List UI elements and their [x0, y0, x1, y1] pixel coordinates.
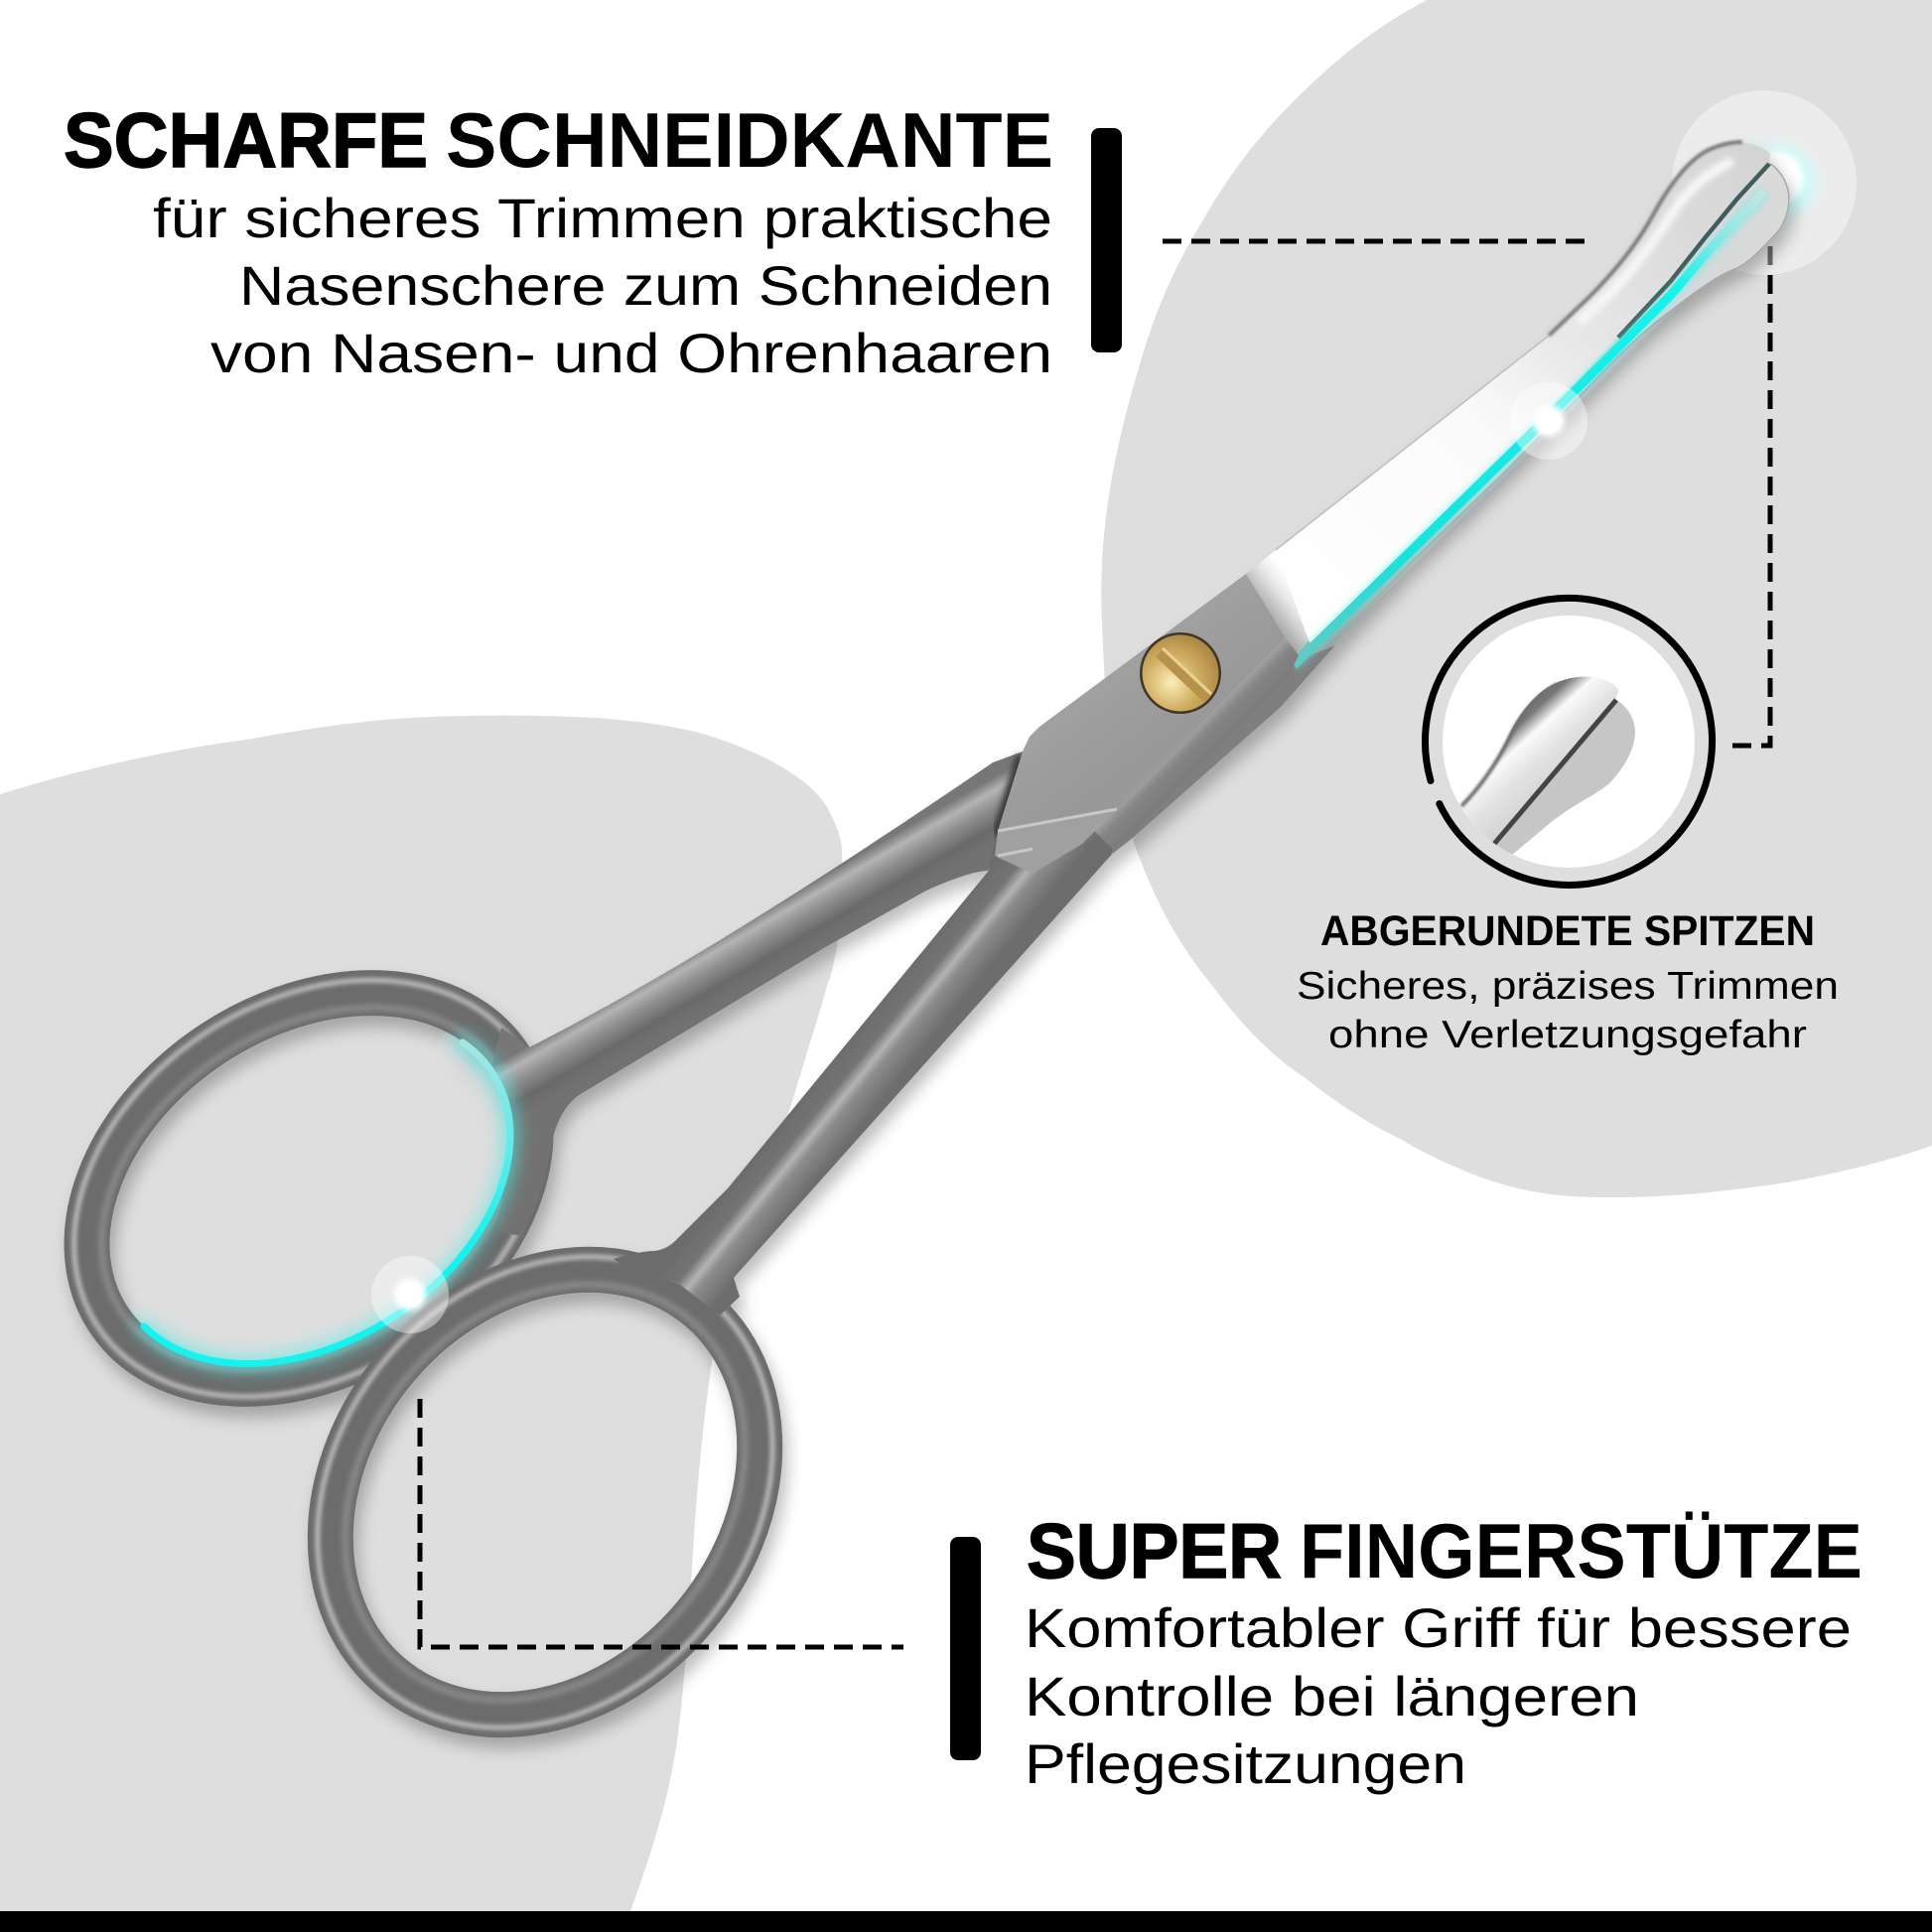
inset white disc	[1443, 616, 1695, 868]
background blob: top right	[1101, 0, 1932, 1197]
text block: rounded tips description: Sicheres, präzises Trimmen	[1297, 965, 1839, 1008]
text block: finger support description	[1025, 1596, 1852, 1795]
blade facet	[1246, 550, 1324, 657]
heading: Abgerundete Spitzen: ABGERUNDETE SPITZEN	[1320, 907, 1815, 955]
lower blade root	[1112, 645, 1335, 854]
tip highlight halo	[1672, 90, 1857, 275]
text block: finger support description: Komfortabler Griff für bessere	[1025, 1596, 1852, 1659]
bottom black bar	[0, 1911, 1932, 1932]
block crease	[998, 809, 1117, 856]
upper blade	[1276, 143, 1770, 645]
cutting edge cyan line	[1294, 192, 1764, 665]
text block: sharp edge description	[153, 187, 1052, 384]
heading: Super Fingerstütze	[1027, 1507, 1863, 1594]
upper handle stem	[491, 752, 1033, 1236]
text block: rounded tips description: ohne Verletzungsgefahr	[1328, 1014, 1807, 1056]
heading: Super Fingerstütze: SUPER	[1027, 1507, 1282, 1594]
inset blade tip	[1459, 677, 1635, 854]
lower finger ring	[223, 1165, 867, 1820]
handle crossing shadow	[999, 757, 1023, 836]
text block: finger support description: Pflegesitzungen	[1025, 1732, 1466, 1795]
text block: finger support description: Kontrolle bei längeren	[1025, 1665, 1639, 1727]
text block: rounded tips description	[1297, 965, 1839, 1056]
highlight dot: ring	[371, 1256, 449, 1333]
text block: sharp edge description: Nasenschere zum Schneiden	[239, 254, 1052, 317]
highlight dot: cutting edge	[1510, 382, 1587, 460]
inset ring	[1426, 598, 1713, 885]
inset lower blade	[1479, 700, 1635, 862]
heading: Scharfe Schneidkante	[64, 96, 1053, 184]
dashed leader: tip to inset	[1729, 246, 1770, 746]
pivot block top face	[998, 574, 1286, 831]
inset slit	[1494, 700, 1616, 844]
text block: sharp edge description: für sicheres Trimmen praktische	[153, 187, 1052, 249]
inset edge shading	[1461, 684, 1559, 806]
lower blade	[1112, 164, 1789, 854]
brass screw	[1140, 632, 1221, 714]
background blob: bottom left	[0, 716, 843, 1911]
accent bar: top	[1091, 128, 1122, 352]
inset circle: rounded tip	[1426, 598, 1713, 885]
text block: sharp edge description: von Nasen- und Ohrenhaaren	[210, 322, 1052, 384]
pivot block side face	[1092, 638, 1299, 851]
inset upper blade	[1461, 677, 1618, 842]
accent bar: bottom	[950, 1537, 981, 1760]
tip glow	[1741, 146, 1813, 217]
cyan ring highlight	[144, 1042, 510, 1364]
stem patch below crease	[995, 809, 1117, 874]
dashed leader: top	[1163, 238, 1587, 244]
heading: Scharfe Schneidkante: SCHARFE	[64, 96, 428, 184]
dashed leader: bottom	[420, 1399, 903, 1647]
blade slit	[1618, 164, 1769, 338]
heading: Scharfe Schneidkante: SCHNEIDKANTE	[446, 96, 1053, 184]
upper finger ring	[0, 895, 621, 1482]
blade top edge shading	[1276, 142, 1742, 550]
lower handle stem	[614, 809, 1135, 1315]
heading: Super Fingerstütze: FINGERSTÜTZE	[1300, 1507, 1863, 1594]
